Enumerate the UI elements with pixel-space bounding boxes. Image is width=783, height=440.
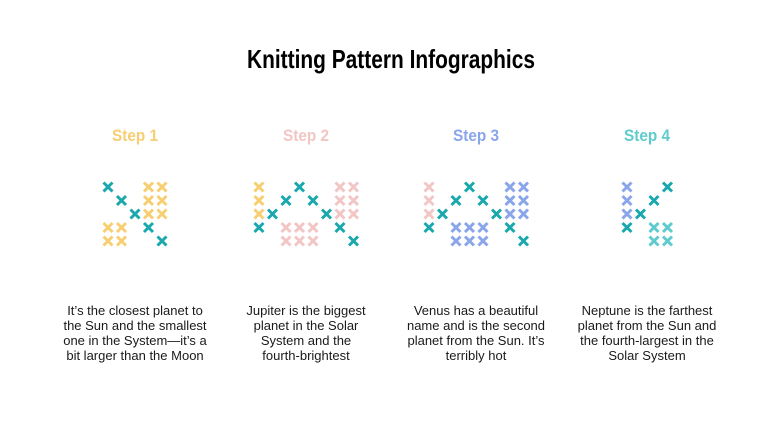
text: step 4: Solar System [608, 348, 686, 363]
text: step 4: the fourth-largest in the [580, 333, 714, 348]
pattern: step 2 [254, 182, 358, 246]
text: step 4: Neptune is the farthest [582, 303, 712, 318]
heading: step 2: Step 2 [283, 126, 329, 145]
text: step 2: fourth-brightest [262, 348, 350, 363]
pattern: step 1 [104, 182, 166, 246]
text: step 2 [246, 303, 366, 363]
heading: step 4: Step 4 [624, 126, 670, 145]
title: Knitting Pattern Infographics [247, 44, 535, 74]
text: step 1 [63, 303, 207, 363]
pattern: step 3 [424, 182, 528, 246]
text: step 1: one in the System—it’s a [63, 333, 207, 348]
text: step 3 [407, 303, 545, 363]
text: step 3: planet from the Sun. It’s [407, 333, 545, 348]
text: step 2: planet in the Solar [254, 318, 358, 333]
text: step 4: planet from the Sun and [578, 318, 716, 333]
heading: step 3: Step 3 [453, 126, 499, 145]
text: step 2: Jupiter is the biggest [246, 303, 366, 318]
text: step 2: System and the [261, 333, 351, 348]
text: step 3: name and is the second [407, 318, 545, 333]
text: step 1: It’s the closest planet to [67, 303, 203, 318]
text: step 1: bit larger than the Moon [66, 348, 204, 363]
text: step 3: terribly hot [446, 348, 506, 363]
text: step 1: the Sun and the smallest [63, 318, 207, 333]
text: step 4 [578, 303, 716, 363]
heading: step 1: Step 1 [112, 126, 158, 145]
text: step 3: Venus has a beautiful [414, 303, 538, 318]
pattern: step 4 [622, 182, 672, 246]
